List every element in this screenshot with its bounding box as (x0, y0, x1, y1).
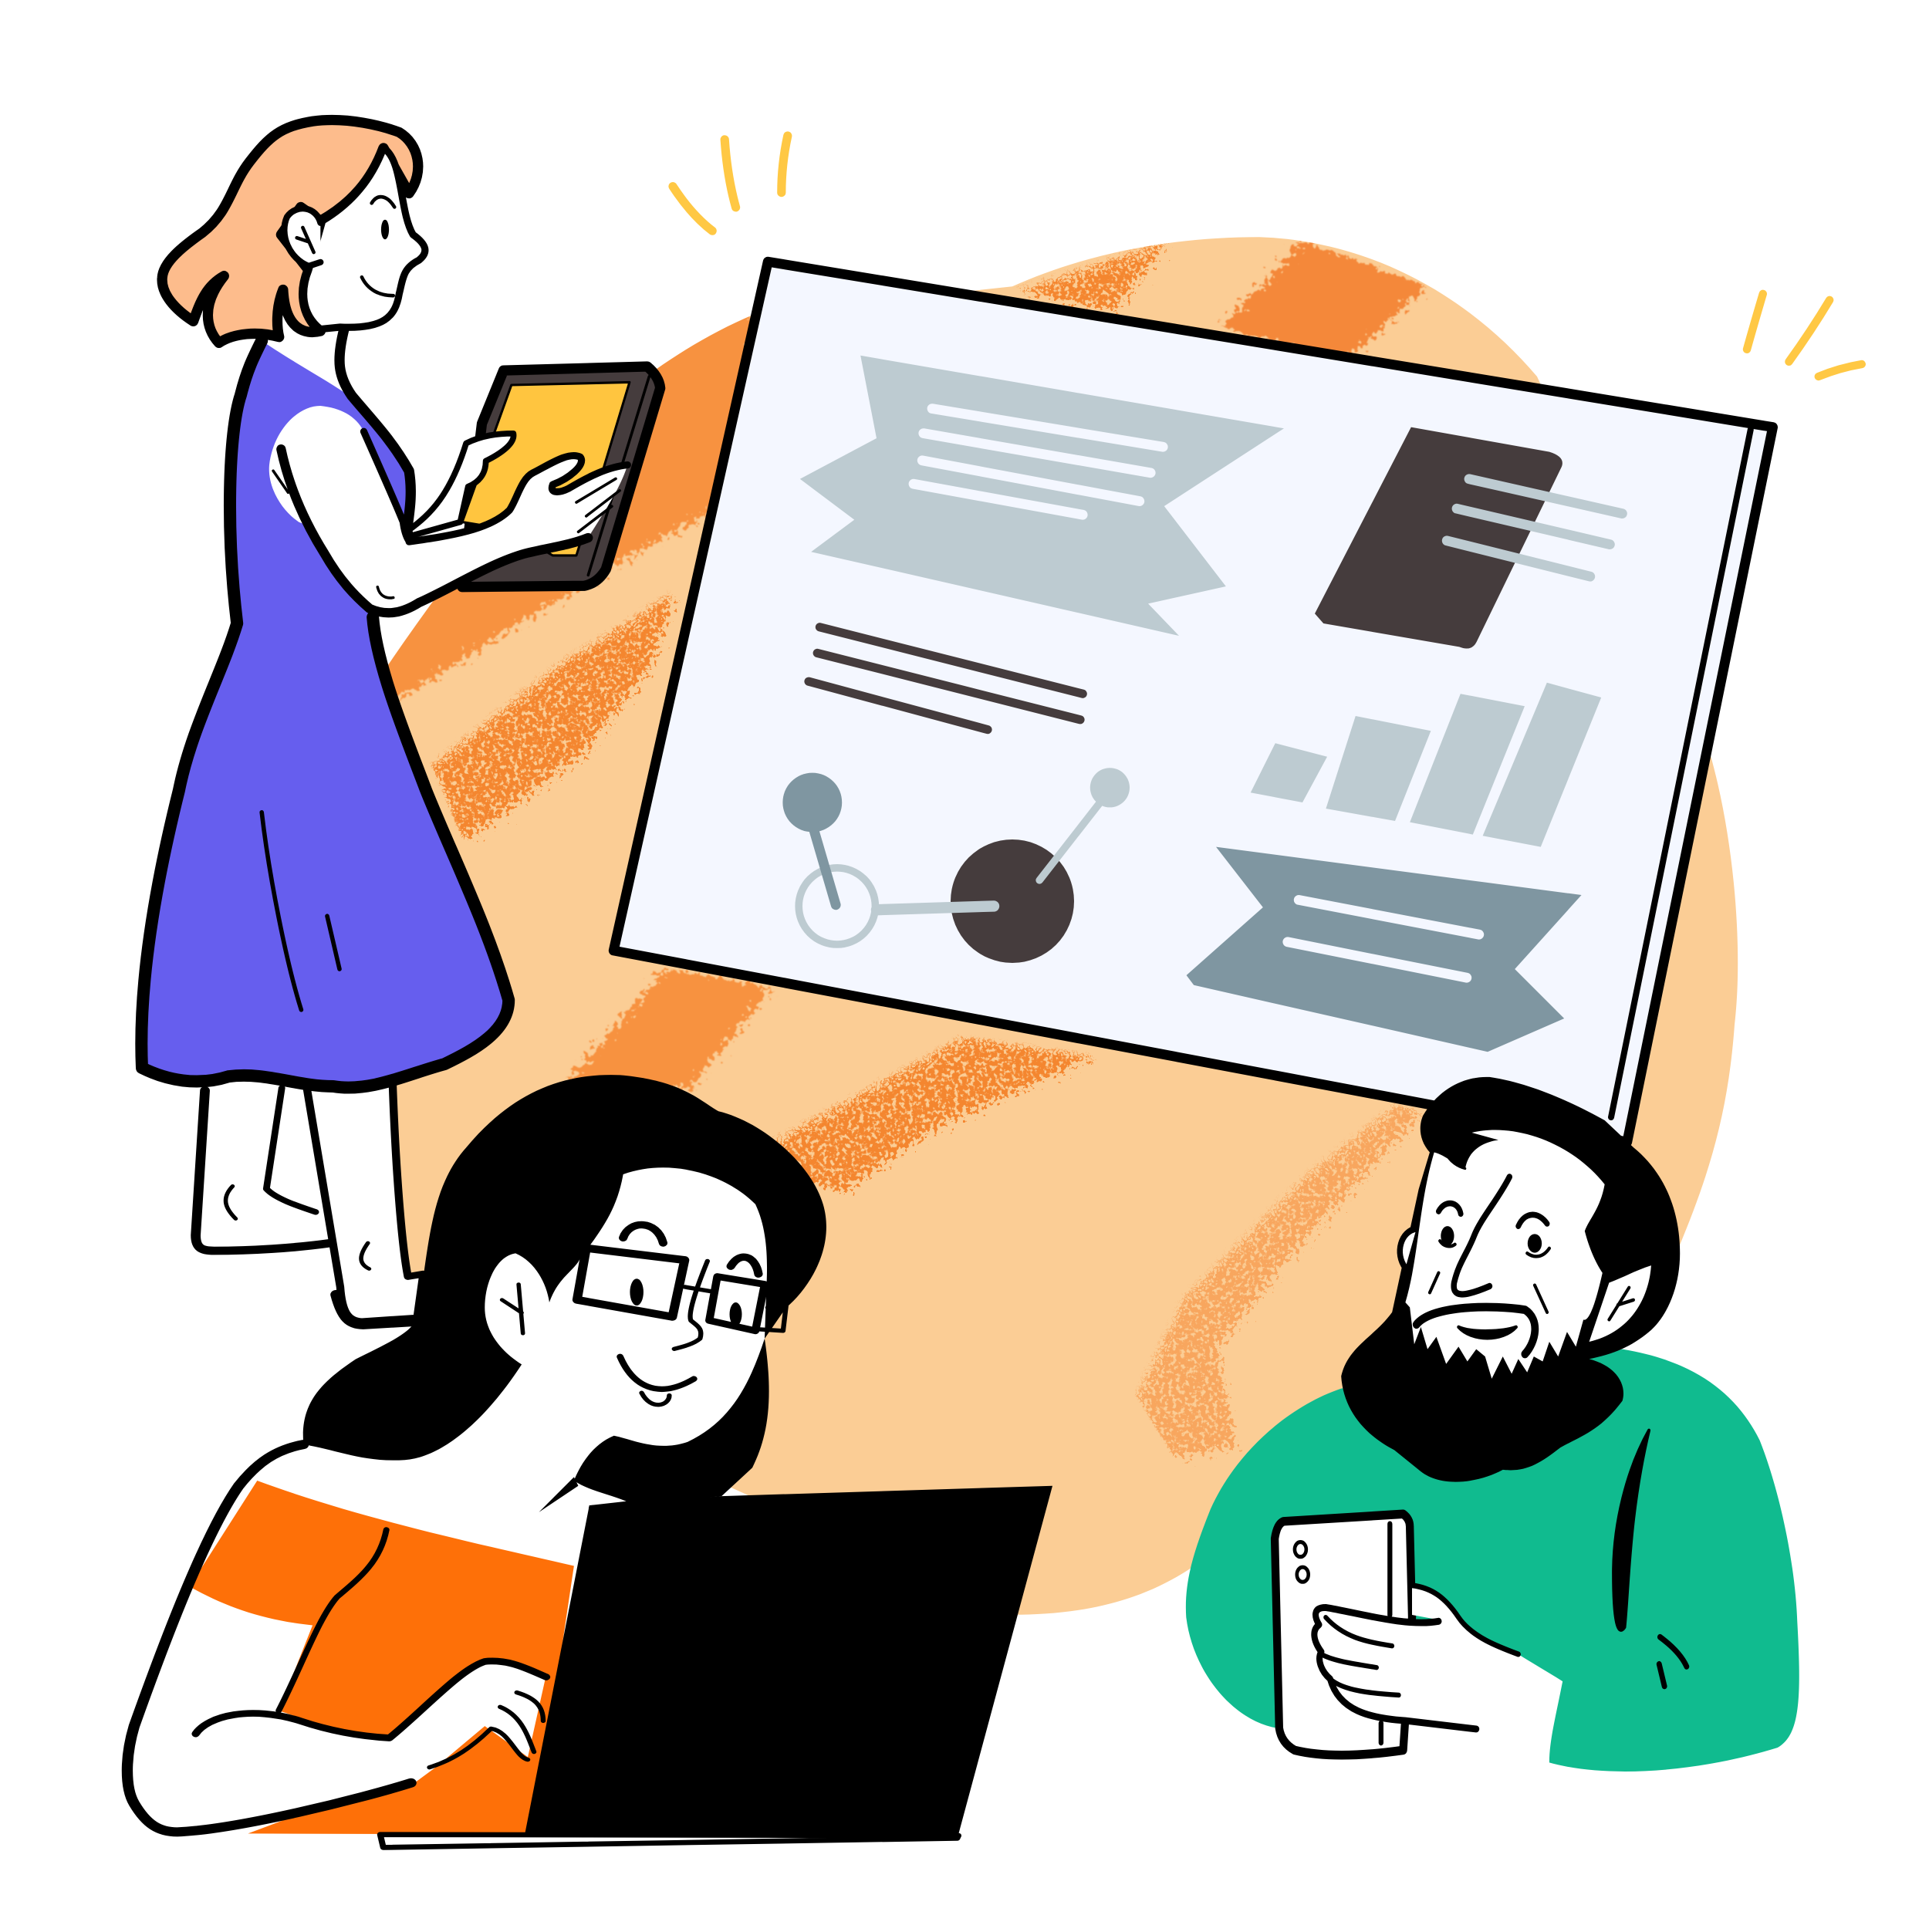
arm and hand (269, 406, 627, 613)
facial features (1417, 1152, 1633, 1354)
tablet (462, 366, 660, 587)
sweater fold marks (1613, 1430, 1687, 1686)
presentation board (613, 262, 1773, 1142)
face details and glasses (502, 1224, 786, 1405)
hair and beard (1341, 1077, 1680, 1482)
legs (196, 1080, 424, 1325)
near hand on tablet (409, 434, 514, 535)
neck line (340, 329, 410, 530)
hand holding phone (1314, 1586, 1562, 1750)
facial features (297, 197, 394, 296)
hair strand tip (539, 1477, 578, 1512)
face (1405, 1130, 1605, 1379)
person: woman in blue dress with tablet (141, 120, 660, 1325)
phone (1275, 1514, 1412, 1755)
banner: bottom right with text lines (1187, 847, 1582, 1052)
bar chart (1251, 683, 1601, 847)
dark card with lines (1315, 427, 1622, 649)
upper body, head and tablet (162, 120, 660, 613)
right ear (1589, 1265, 1651, 1342)
hair (303, 1075, 826, 1509)
hair (162, 120, 418, 343)
face, neck and body (125, 1167, 767, 1835)
background blob with brush stripes (370, 237, 1738, 1615)
person: bearded man with phone (1186, 1077, 1799, 1772)
ear (284, 208, 320, 266)
green sweater (1186, 1349, 1799, 1772)
dress (141, 341, 508, 1088)
network diagram (782, 768, 1130, 963)
laptop (380, 1486, 1052, 1847)
sparks: upper left (673, 136, 788, 231)
banner: top left with text lines (800, 356, 1284, 636)
sparks: upper right (1747, 294, 1862, 377)
text lines (809, 627, 1083, 730)
body outline and arm (127, 1444, 546, 1832)
orange shirt (190, 1481, 574, 1835)
person: woman with glasses at laptop (125, 1075, 1052, 1847)
left ear (1400, 1228, 1417, 1268)
face (304, 148, 425, 329)
